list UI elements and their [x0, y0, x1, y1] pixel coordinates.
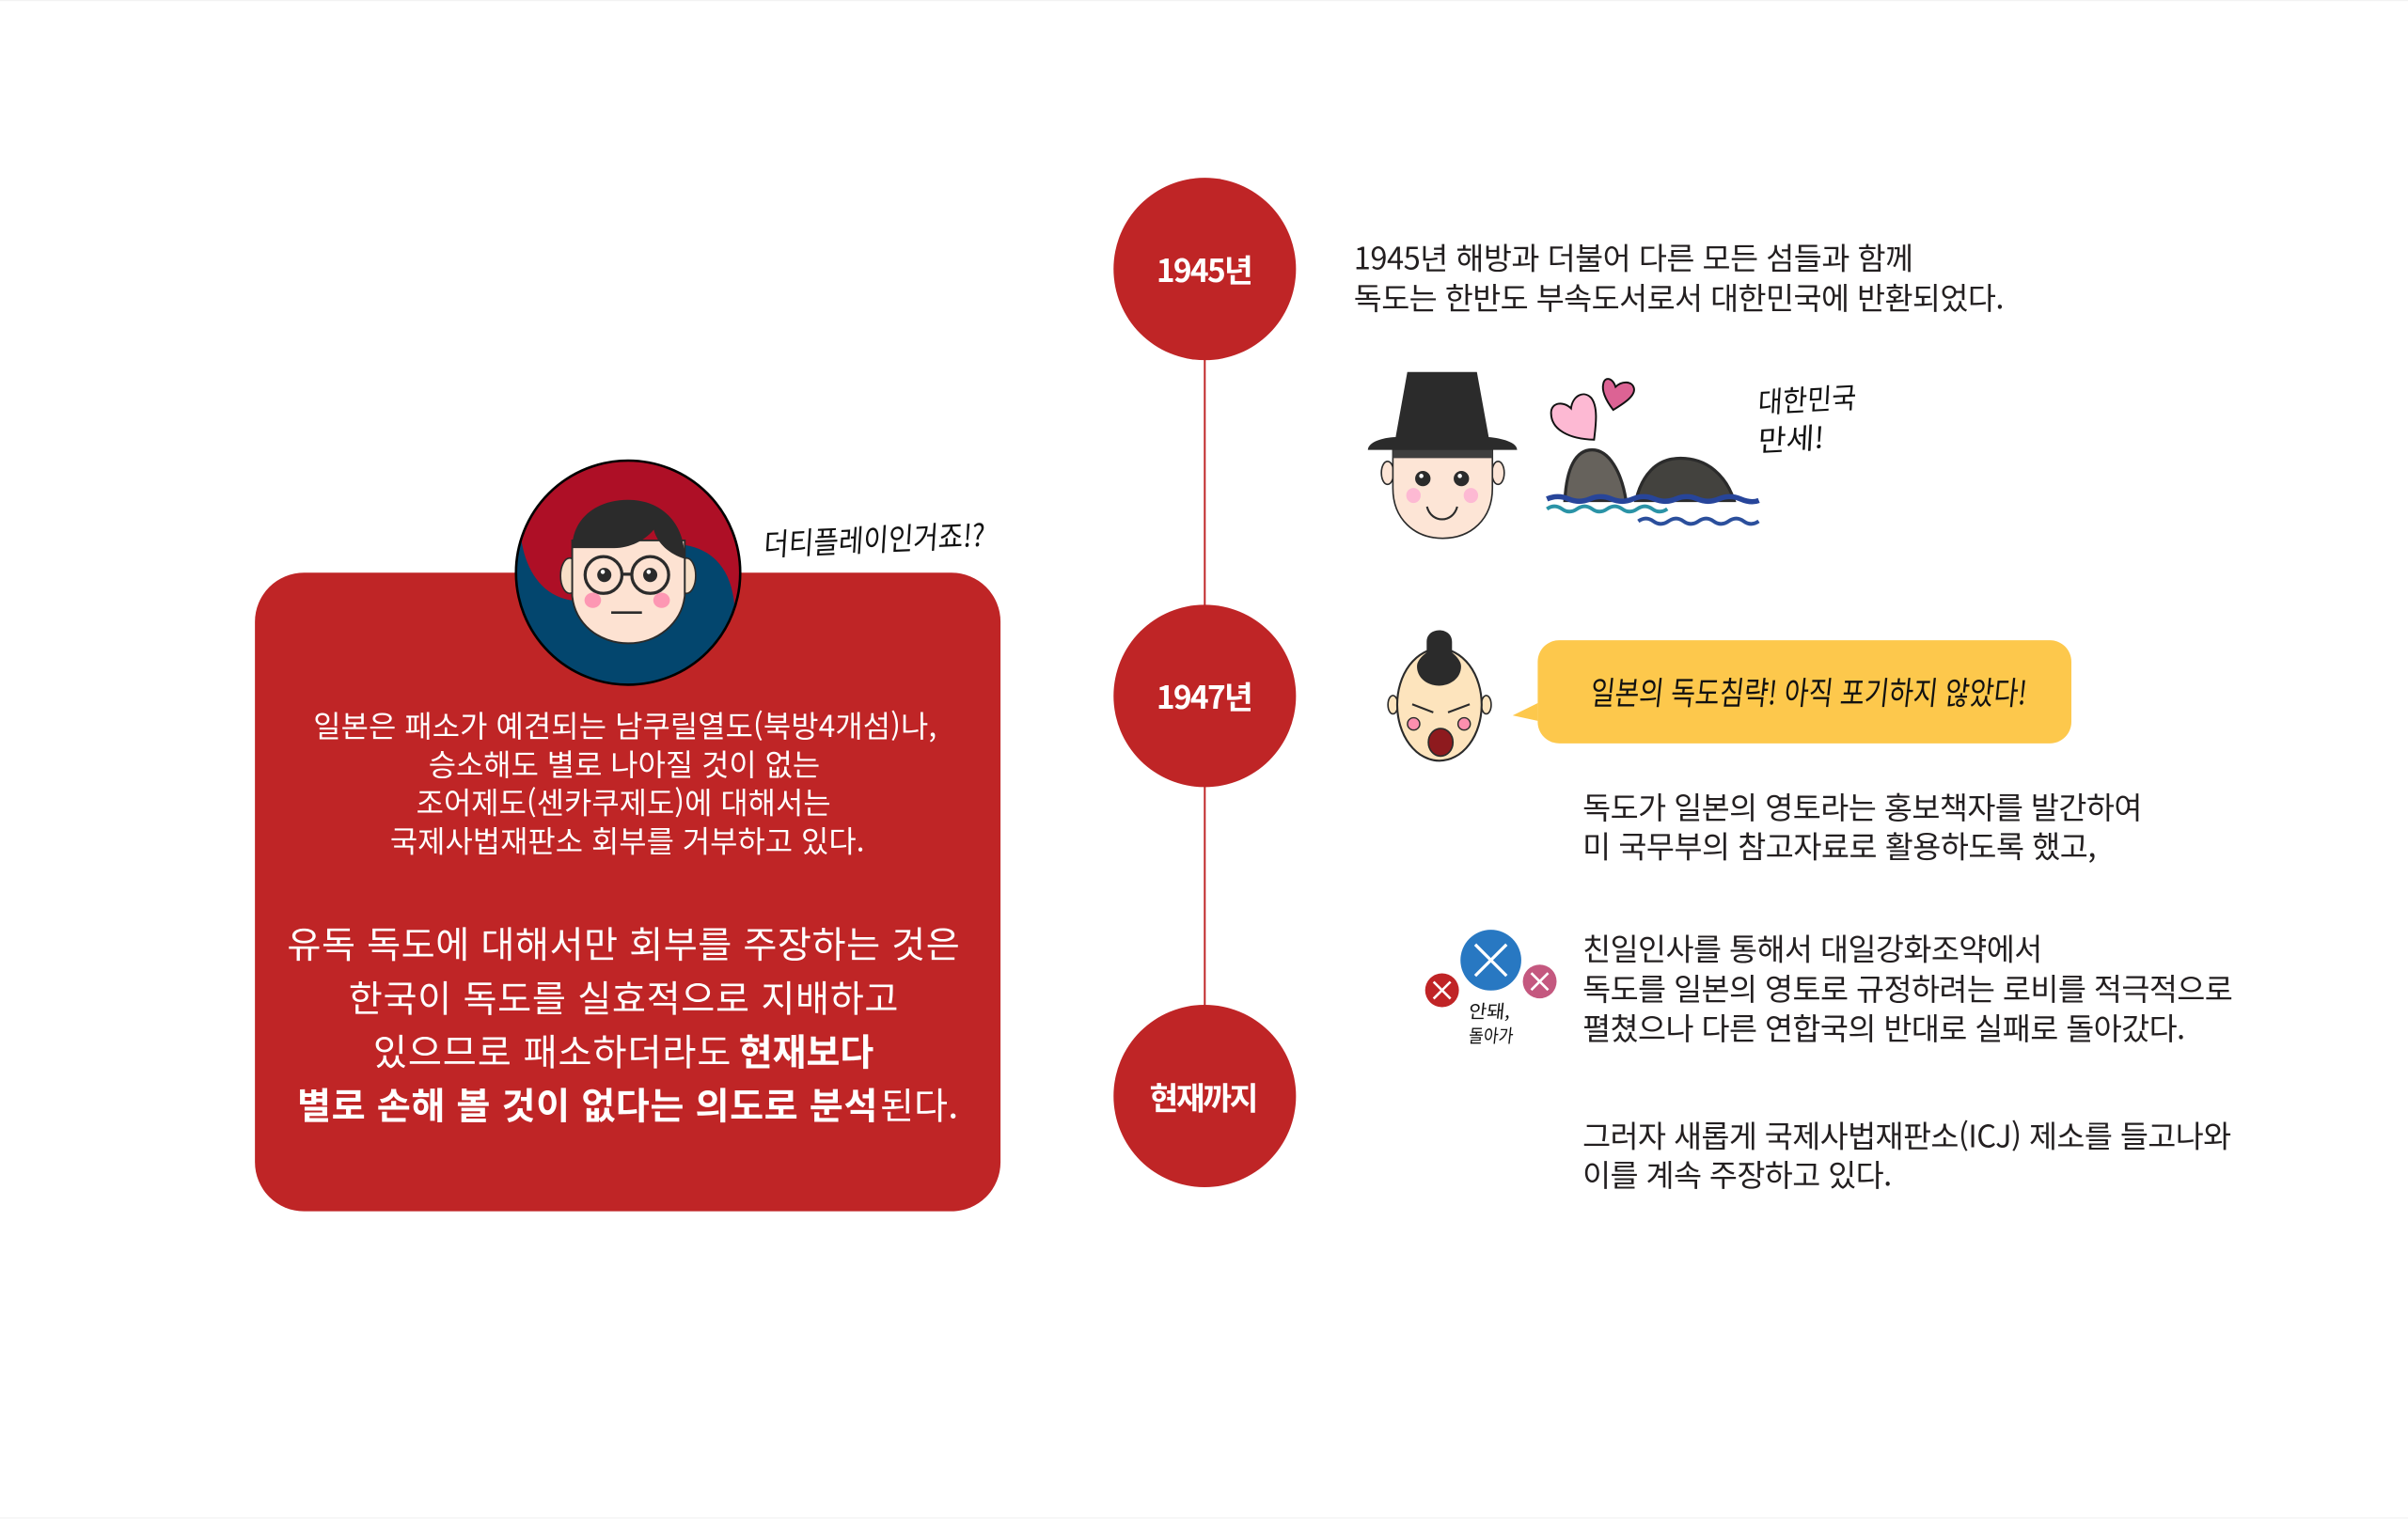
- timeline node: 1945: [1113, 178, 1296, 360]
- text block: analysis: [287, 916, 960, 1131]
- text block: 1945: 1945년 해방과 더불어 다른 모든 섬들과 함께: [1354, 234, 1913, 278]
- icon: rejected X circles: 돌아가: [1468, 1021, 1515, 1048]
- text block: analysis: 있으므로 패소하더라도: [373, 1025, 731, 1077]
- text block: analysis: 한국이 독도를 실효적으로 지배하고: [349, 970, 898, 1023]
- handwritten: hurray Korea: 대한민국: [1757, 374, 1858, 421]
- timeline node: 1947: 1947년: [1157, 672, 1253, 718]
- text block: Japan's ICJ refusal: 조어제도(센카쿠제도)에 대해서는: [417, 780, 831, 823]
- icon: rejected X circles: [1425, 930, 1557, 1048]
- text block: present: [1582, 1113, 2231, 1196]
- handwritten: hurray Korea: [1757, 374, 1858, 460]
- text block: Japan's ICJ refusal: 일본은 패소가 예견되는 남쿠릴열도(북방4개섬)나,: [313, 703, 936, 746]
- text block: 1947: [1582, 784, 2142, 868]
- handwritten remark: 더티플레이인거죠!?: [763, 511, 986, 565]
- timeline node: present: 현재까지: [1150, 1073, 1258, 1119]
- text block: Japan's ICJ refusal: 승소해도 별로 나아질 것이 없는: [429, 742, 820, 785]
- text block: Japan's ICJ refusal: [313, 703, 936, 861]
- text block: lobbying: 친일인사를 통해서 대일강화조약에서: [1582, 925, 2042, 969]
- text block: 1947: 미 국무부의 참고자료로 활용하도록 했고,: [1582, 823, 2096, 868]
- text block: analysis: 별로 손해 볼 것이 없다는 의도로 분석: [297, 1078, 877, 1131]
- callout: speech bubble: [1513, 640, 2071, 744]
- text block: analysis: 유독 독도에 대해서만 회부를 주장하는 것은: [287, 916, 960, 969]
- timeline node: 1947: [1113, 604, 1296, 787]
- text block: 1947: 독도가 일본의 영토라는 홍보책자를 발간하여: [1582, 784, 2142, 828]
- text block: 1945: 독도는 한반도 부속도서로서 대한민국에 반환되었다.: [1354, 274, 2004, 319]
- timeline node: present: [1113, 1005, 1296, 1187]
- icon: Dokdo islets and waves: [1547, 450, 1759, 524]
- text block: lobbying: 독도를 일본의 영토로 규정하려는 로비를 적극적으로: [1582, 965, 2233, 1010]
- icon: hearts: [1551, 379, 1634, 440]
- icon: angry Japanese man: [1388, 630, 1491, 760]
- handwritten: hurray Korea: 만세!: [1757, 414, 1825, 460]
- icon: rejected X circles: 안돼,: [1468, 996, 1512, 1024]
- text block: analysis: 된다.: [880, 1078, 958, 1131]
- text block: present: 이를 계속 주장하고 있다.: [1582, 1151, 1892, 1196]
- text block: lobbying: 펼쳤으나 다른 연합국의 반대로 실패로 돌아갔다.: [1582, 1005, 2185, 1049]
- timeline node: 1945: 1945년: [1157, 245, 1253, 291]
- text block: analysis: 현재보다: [739, 1025, 873, 1077]
- text block: Japan's ICJ refusal: 국제사법재판소 회부를 거부하고 있다.: [390, 818, 865, 861]
- panel: explanation: [255, 572, 1000, 1212]
- text block: present: 그러자 새롭게 국제사법재판소(ICJ) 제소를 들고나와: [1582, 1113, 2231, 1157]
- callout: speech bubble: 일본의 독도침략! 아직 포기하지 않았다!: [1588, 667, 2030, 714]
- icon: Korean man with gat hat: [1368, 372, 1518, 539]
- icon: avatar with glasses on taegeuk: [516, 461, 740, 685]
- text block: 1945: [1354, 234, 2004, 319]
- text block: lobbying: [1582, 925, 2233, 1049]
- timeline line: [1204, 359, 1205, 1006]
